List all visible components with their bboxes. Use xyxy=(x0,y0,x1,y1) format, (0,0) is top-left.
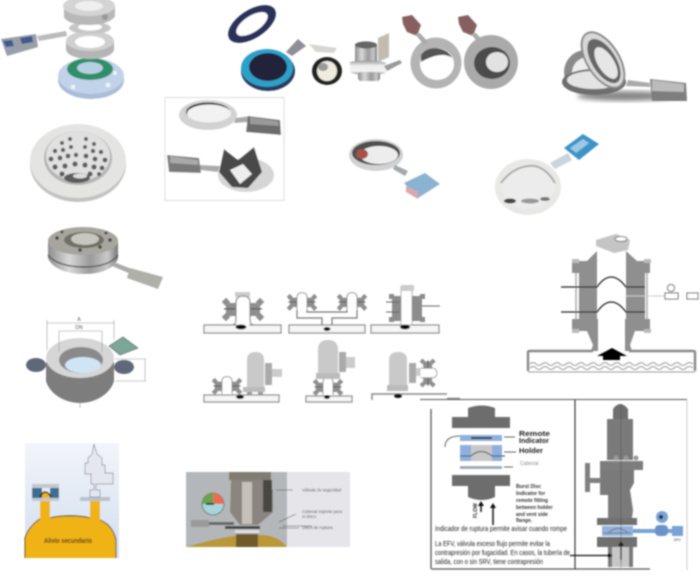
scheme: disc under safety valve xyxy=(306,340,355,402)
scheme: double disc with gauge xyxy=(371,285,440,333)
assembly labels: Indicator xyxy=(519,436,549,445)
diagram: six installation schemes xyxy=(204,285,460,402)
photo: safety valve with disc assembly and labels: el disco xyxy=(302,514,317,519)
diagram: dimensioned holder xyxy=(26,317,146,408)
assembly labels: between holder xyxy=(516,505,553,511)
photo: safety valve with disc assembly and labels: Disco de ruptura xyxy=(302,525,333,530)
assembly labels: Remote xyxy=(519,429,550,438)
product: dome with blue indicator tag xyxy=(349,139,440,199)
icon: EFV excess flow valve xyxy=(633,511,683,542)
assembly labels: Burst Disc xyxy=(516,484,541,490)
explanatory text: La EFV, válvula exceso flujo permite evitar la xyxy=(435,539,551,548)
assembly labels: Holder xyxy=(519,446,543,455)
scheme: disc on vessel nozzle xyxy=(204,292,281,333)
exploded holder assembly: FLOW xyxy=(473,503,479,518)
scheme: disc downstream of safety valve xyxy=(372,352,460,400)
product: stacked chrome domes with tag xyxy=(562,25,687,101)
scheme: disc next to safety valve xyxy=(204,352,282,402)
diagram: yellow tank secondary relief xyxy=(25,443,119,558)
panel: framed rupture discs with indicator xyxy=(165,98,284,200)
icon: EFV excess flow valve: EFV xyxy=(674,538,681,542)
diagram: dimensioned holder: DN xyxy=(75,325,83,331)
diagram: dimensioned holder: A xyxy=(77,317,81,323)
exploded holder assembly xyxy=(445,406,516,525)
scheme: branched twin discs xyxy=(287,293,367,333)
assembly labels: Indicator for xyxy=(516,491,545,497)
safety relief valve section xyxy=(570,404,683,568)
diagram: double rupture disc on vessel xyxy=(528,234,698,372)
assembly labels: remote fitting xyxy=(516,498,548,504)
product: perforated dome disc xyxy=(30,124,126,202)
product: blue gasket disc set xyxy=(222,0,342,91)
explanatory text: salida, con o sin SRV, tiene contrapresión xyxy=(435,557,543,566)
photo: safety valve with disc assembly and labels: Válvula de seguridad xyxy=(302,488,342,492)
assembly labels: Cabezal xyxy=(520,461,538,467)
assembly labels: flange. xyxy=(516,518,533,524)
photo: safety valve with disc assembly and labels xyxy=(186,472,350,547)
assembly labels: and vent side xyxy=(516,512,548,518)
product: white dome with blue tag xyxy=(495,134,599,215)
explanatory text: Indicador de ruptura permite avisar cuando rompe xyxy=(435,524,567,533)
product: bolted disc holder with tab xyxy=(48,227,163,289)
diagram: yellow tank secondary relief: Alivio secundario xyxy=(44,536,92,545)
product: exploded disc holder stack xyxy=(1,0,124,99)
photo: safety valve with disc assembly and labels: Cabezal soporte para xyxy=(302,509,343,514)
assembly labels xyxy=(516,429,553,524)
explanatory text: contrapresión por fugacidad. En casos, la tubería de xyxy=(435,548,570,557)
panel: remote indicator and EFV explanation xyxy=(420,400,687,570)
product: two rupture rings with brown tags xyxy=(402,15,518,89)
product: sanitary clamp holder xyxy=(350,33,402,81)
explanatory text xyxy=(435,524,570,566)
